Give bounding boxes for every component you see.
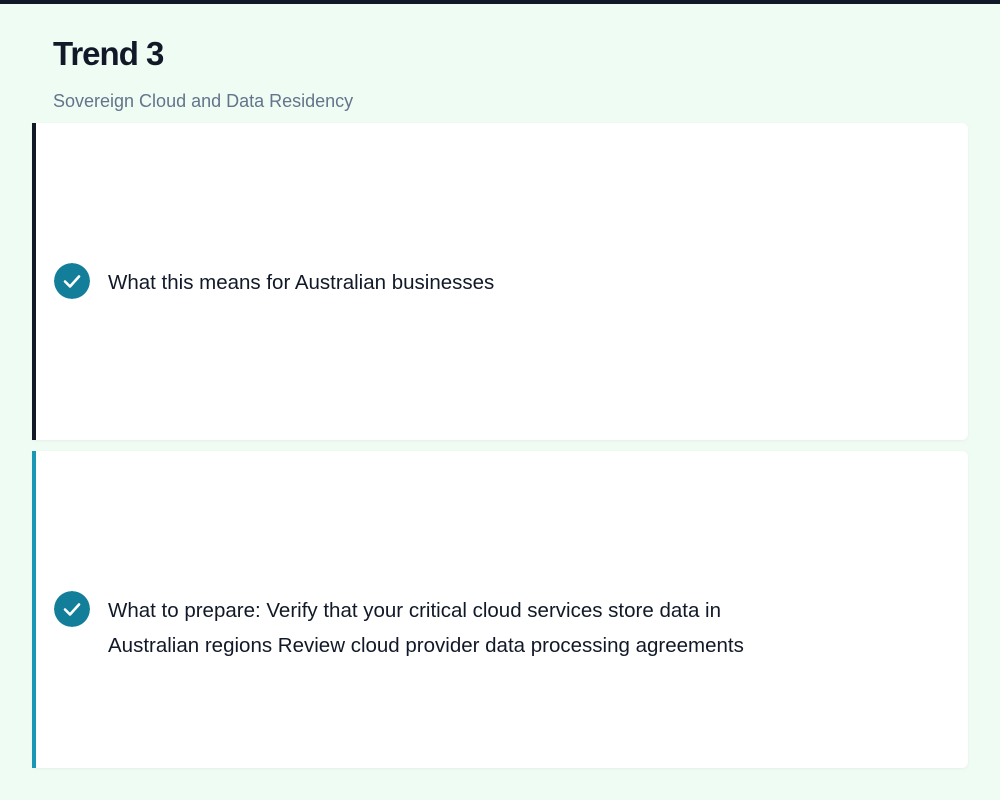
- item: what this means: [54, 263, 494, 299]
- title: Trend 3: [53, 35, 163, 72]
- item: what to prepare: Australian regions Review cloud provider data processing agreements: [108, 634, 744, 657]
- item: what to prepare: What to prepare: Verify that your critical cloud services store data in: [108, 599, 721, 622]
- panel: what this means: [32, 123, 968, 440]
- subtitle: Sovereign Cloud and Data Residency: [53, 91, 353, 111]
- icon: check: [54, 591, 90, 627]
- item: what to prepare: [54, 591, 744, 657]
- item: what this means: What this means for Australian businesses: [108, 271, 494, 294]
- icon: check: [54, 263, 90, 299]
- panel: what to prepare: [32, 451, 968, 768]
